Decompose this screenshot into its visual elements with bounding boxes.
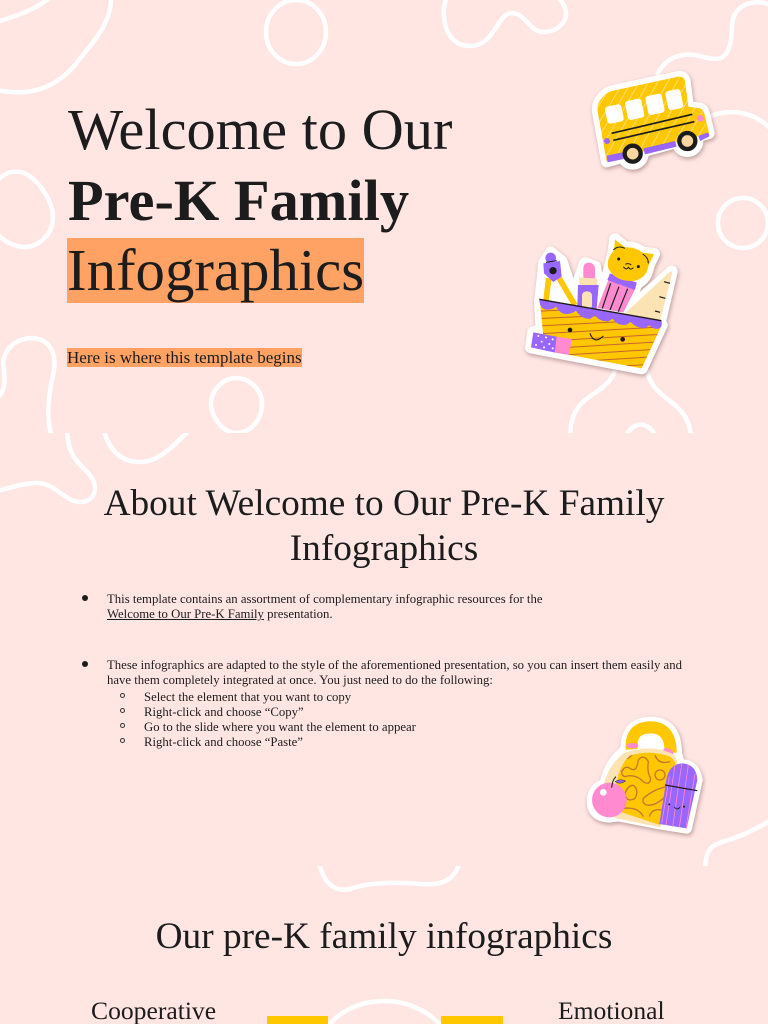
bullet 1: This template contains an assortment of complementary infographic resources for the xyxy=(107,592,542,606)
sub-list of steps: Select the element that you want to copy xyxy=(144,690,351,704)
title: Infographics xyxy=(67,238,364,303)
about heading: Infographics xyxy=(290,528,478,569)
title xyxy=(67,97,452,303)
sub-list of steps: Go to the slide where you want the element to appear xyxy=(144,720,416,734)
sticker: school bus xyxy=(590,70,718,174)
bullet 1: Welcome to Our Pre-K Family presentation. xyxy=(107,607,333,621)
subtitle: Here is where this template begins xyxy=(67,348,302,367)
about heading: About Welcome to Our Pre-K Family xyxy=(104,483,664,524)
yellow block left xyxy=(267,1016,328,1024)
title: Pre-K Family xyxy=(68,168,409,233)
sub-list of steps: Right-click and choose “Copy” xyxy=(144,705,304,719)
sub-list of steps xyxy=(120,690,416,749)
sticker: pencil basket xyxy=(524,233,681,378)
bullet list xyxy=(82,592,682,749)
yellow block right xyxy=(441,1016,503,1024)
sub-list of steps: Right-click and choose “Paste” xyxy=(144,735,303,749)
bullet 2: have them completely integrated at once. You just need to do the following: xyxy=(107,673,493,687)
title: Welcome to Our xyxy=(68,97,452,162)
bullet 2: These infographics are adapted to the style of the aforementioned presentation, so you can insert them easily and xyxy=(107,658,682,672)
sticker: lunch bag with apple xyxy=(585,716,706,838)
bullet 1 xyxy=(82,592,542,621)
bullet 2 xyxy=(82,658,682,687)
section heading: Our pre-K family infographics xyxy=(156,916,612,957)
about heading xyxy=(104,483,664,569)
